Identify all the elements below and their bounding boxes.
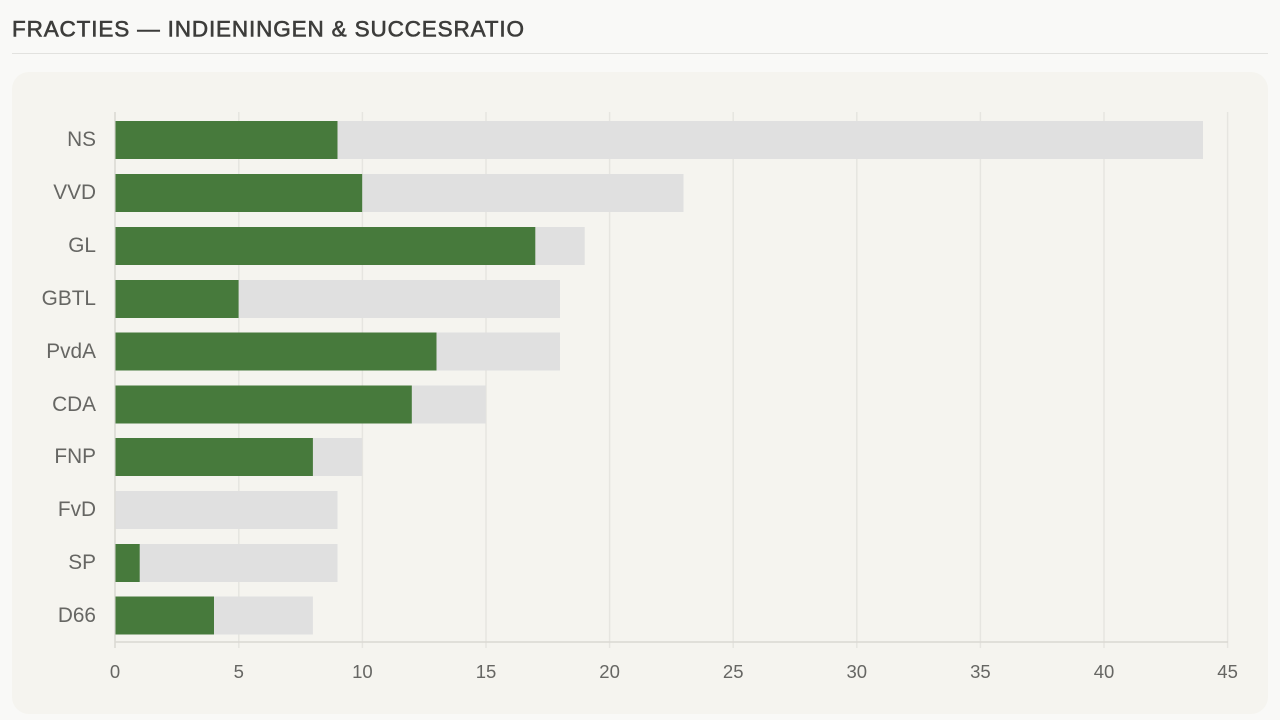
bar row: GL: [116, 227, 585, 265]
bar row: SP: [116, 544, 338, 582]
bar row: VVD: [116, 174, 684, 212]
x axis labels: 10: [352, 661, 373, 682]
title: FRACTIES — INDIENINGEN & SUCCESRATIO: [12, 16, 524, 42]
bar chart: [116, 121, 1203, 634]
category labels: D66: [58, 604, 96, 627]
x axis labels: 45: [1217, 661, 1238, 682]
axis lines: [115, 112, 1228, 648]
bar row: GBTL: [116, 280, 560, 318]
bar row: D66: [116, 596, 313, 634]
bar row: PvdA: [116, 332, 560, 370]
x axis labels: 5: [234, 661, 244, 682]
x axis labels: 0: [110, 661, 120, 682]
bar row: CDA: [116, 386, 486, 424]
category labels: NS: [67, 128, 96, 151]
category labels: CDA: [52, 393, 96, 416]
category labels: [42, 128, 96, 627]
x axis labels: 35: [970, 661, 991, 682]
x axis labels: 25: [723, 661, 743, 682]
category labels: SP: [68, 551, 96, 574]
category labels: PvdA: [46, 340, 96, 363]
category labels: FNP: [54, 445, 96, 468]
x axis labels: 20: [599, 661, 620, 682]
x axis labels: 40: [1094, 661, 1114, 682]
bar row: FNP: [116, 438, 362, 476]
category labels: GL: [68, 234, 96, 257]
x axis labels: 30: [847, 661, 867, 682]
bar row: NS: [116, 121, 1203, 159]
x axis labels: [110, 661, 1238, 682]
category labels: VVD: [53, 181, 96, 204]
x axis labels: 15: [476, 661, 496, 682]
bar row: FvD: [116, 491, 338, 529]
category labels: GBTL: [42, 287, 96, 310]
category labels: FvD: [58, 498, 96, 521]
